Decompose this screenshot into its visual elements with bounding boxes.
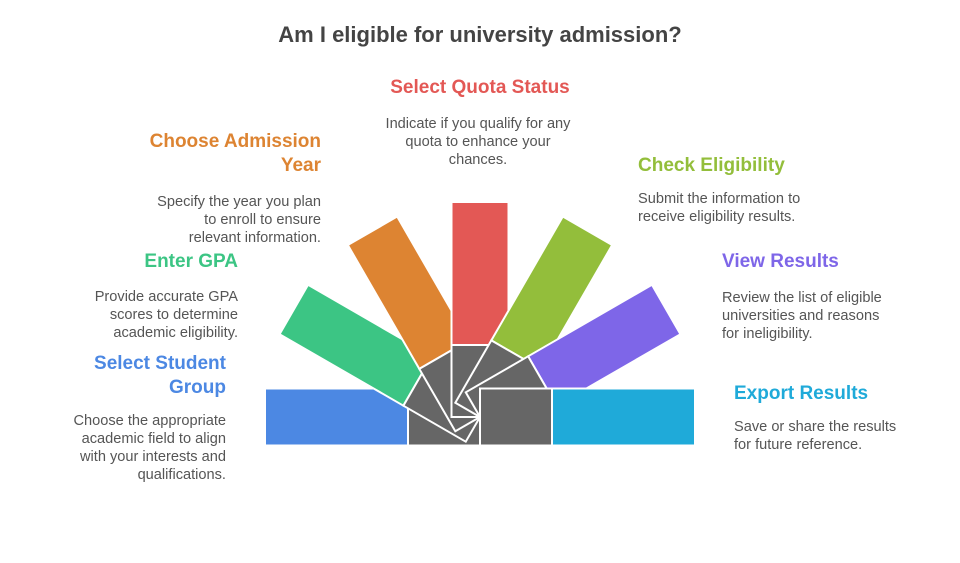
text: admission year — [157, 194, 321, 246]
text: GPA — [95, 289, 238, 341]
text: view results — [722, 290, 882, 342]
text: export results: Save or share the results — [734, 419, 896, 435]
text: admission year: relevant information. — [189, 230, 321, 246]
heading: select student group: Group — [169, 377, 226, 398]
arm: select quota status — [452, 202, 508, 417]
text: admission year: Specify the year you plan — [157, 194, 321, 210]
text: export results: for future reference. — [734, 437, 862, 453]
text: student group: qualifications. — [138, 467, 226, 483]
heading: select quota status: Select Quota Status — [390, 77, 570, 98]
arm: view results — [466, 285, 680, 442]
text: GPA: academic eligibility. — [113, 325, 238, 341]
text: GPA: scores to determine — [110, 307, 238, 323]
heading: export results: Export Results — [734, 383, 868, 404]
text: view results: for ineligibility. — [722, 326, 813, 342]
arm: export results — [480, 388, 695, 446]
text: quota: chances. — [449, 152, 507, 168]
heading: choose admission year: Year — [281, 155, 321, 176]
heading: view results: View Results — [722, 251, 839, 272]
text: quota: Indicate if you qualify for any — [386, 116, 570, 132]
arm: select student group — [265, 388, 480, 446]
heading: choose admission year — [150, 131, 321, 176]
text: check eligibility: Submit the information to — [638, 191, 800, 207]
text: check eligibility — [638, 191, 800, 225]
text: student group — [73, 413, 226, 483]
text: export results — [734, 419, 896, 453]
heading: select student group: Select Student — [94, 353, 226, 374]
heading: select student group — [94, 353, 226, 398]
text: student group: academic field to align — [82, 431, 226, 447]
heading: enter GPA: Enter GPA — [144, 251, 238, 272]
text: student group: Choose the appropriate — [73, 413, 226, 429]
text: view results: universities and reasons — [722, 308, 879, 324]
text: quota: quota to enhance your — [405, 134, 551, 150]
title: Am I eligible for university admission? — [278, 22, 682, 47]
text: quota — [386, 116, 570, 168]
arm: check eligibility — [455, 217, 612, 431]
text: GPA: Provide accurate GPA — [95, 289, 238, 305]
text: check eligibility: receive eligibility results. — [638, 209, 795, 225]
heading: check eligibility: Check Eligibility — [638, 155, 785, 176]
text: student group: with your interests and — [80, 449, 226, 465]
text: admission year: to enroll to ensure — [204, 212, 321, 228]
arm: enter GPA — [280, 285, 494, 442]
text: view results: Review the list of eligible — [722, 290, 882, 306]
heading: choose admission year: Choose Admission — [150, 131, 321, 152]
arm: choose admission year — [348, 217, 505, 431]
